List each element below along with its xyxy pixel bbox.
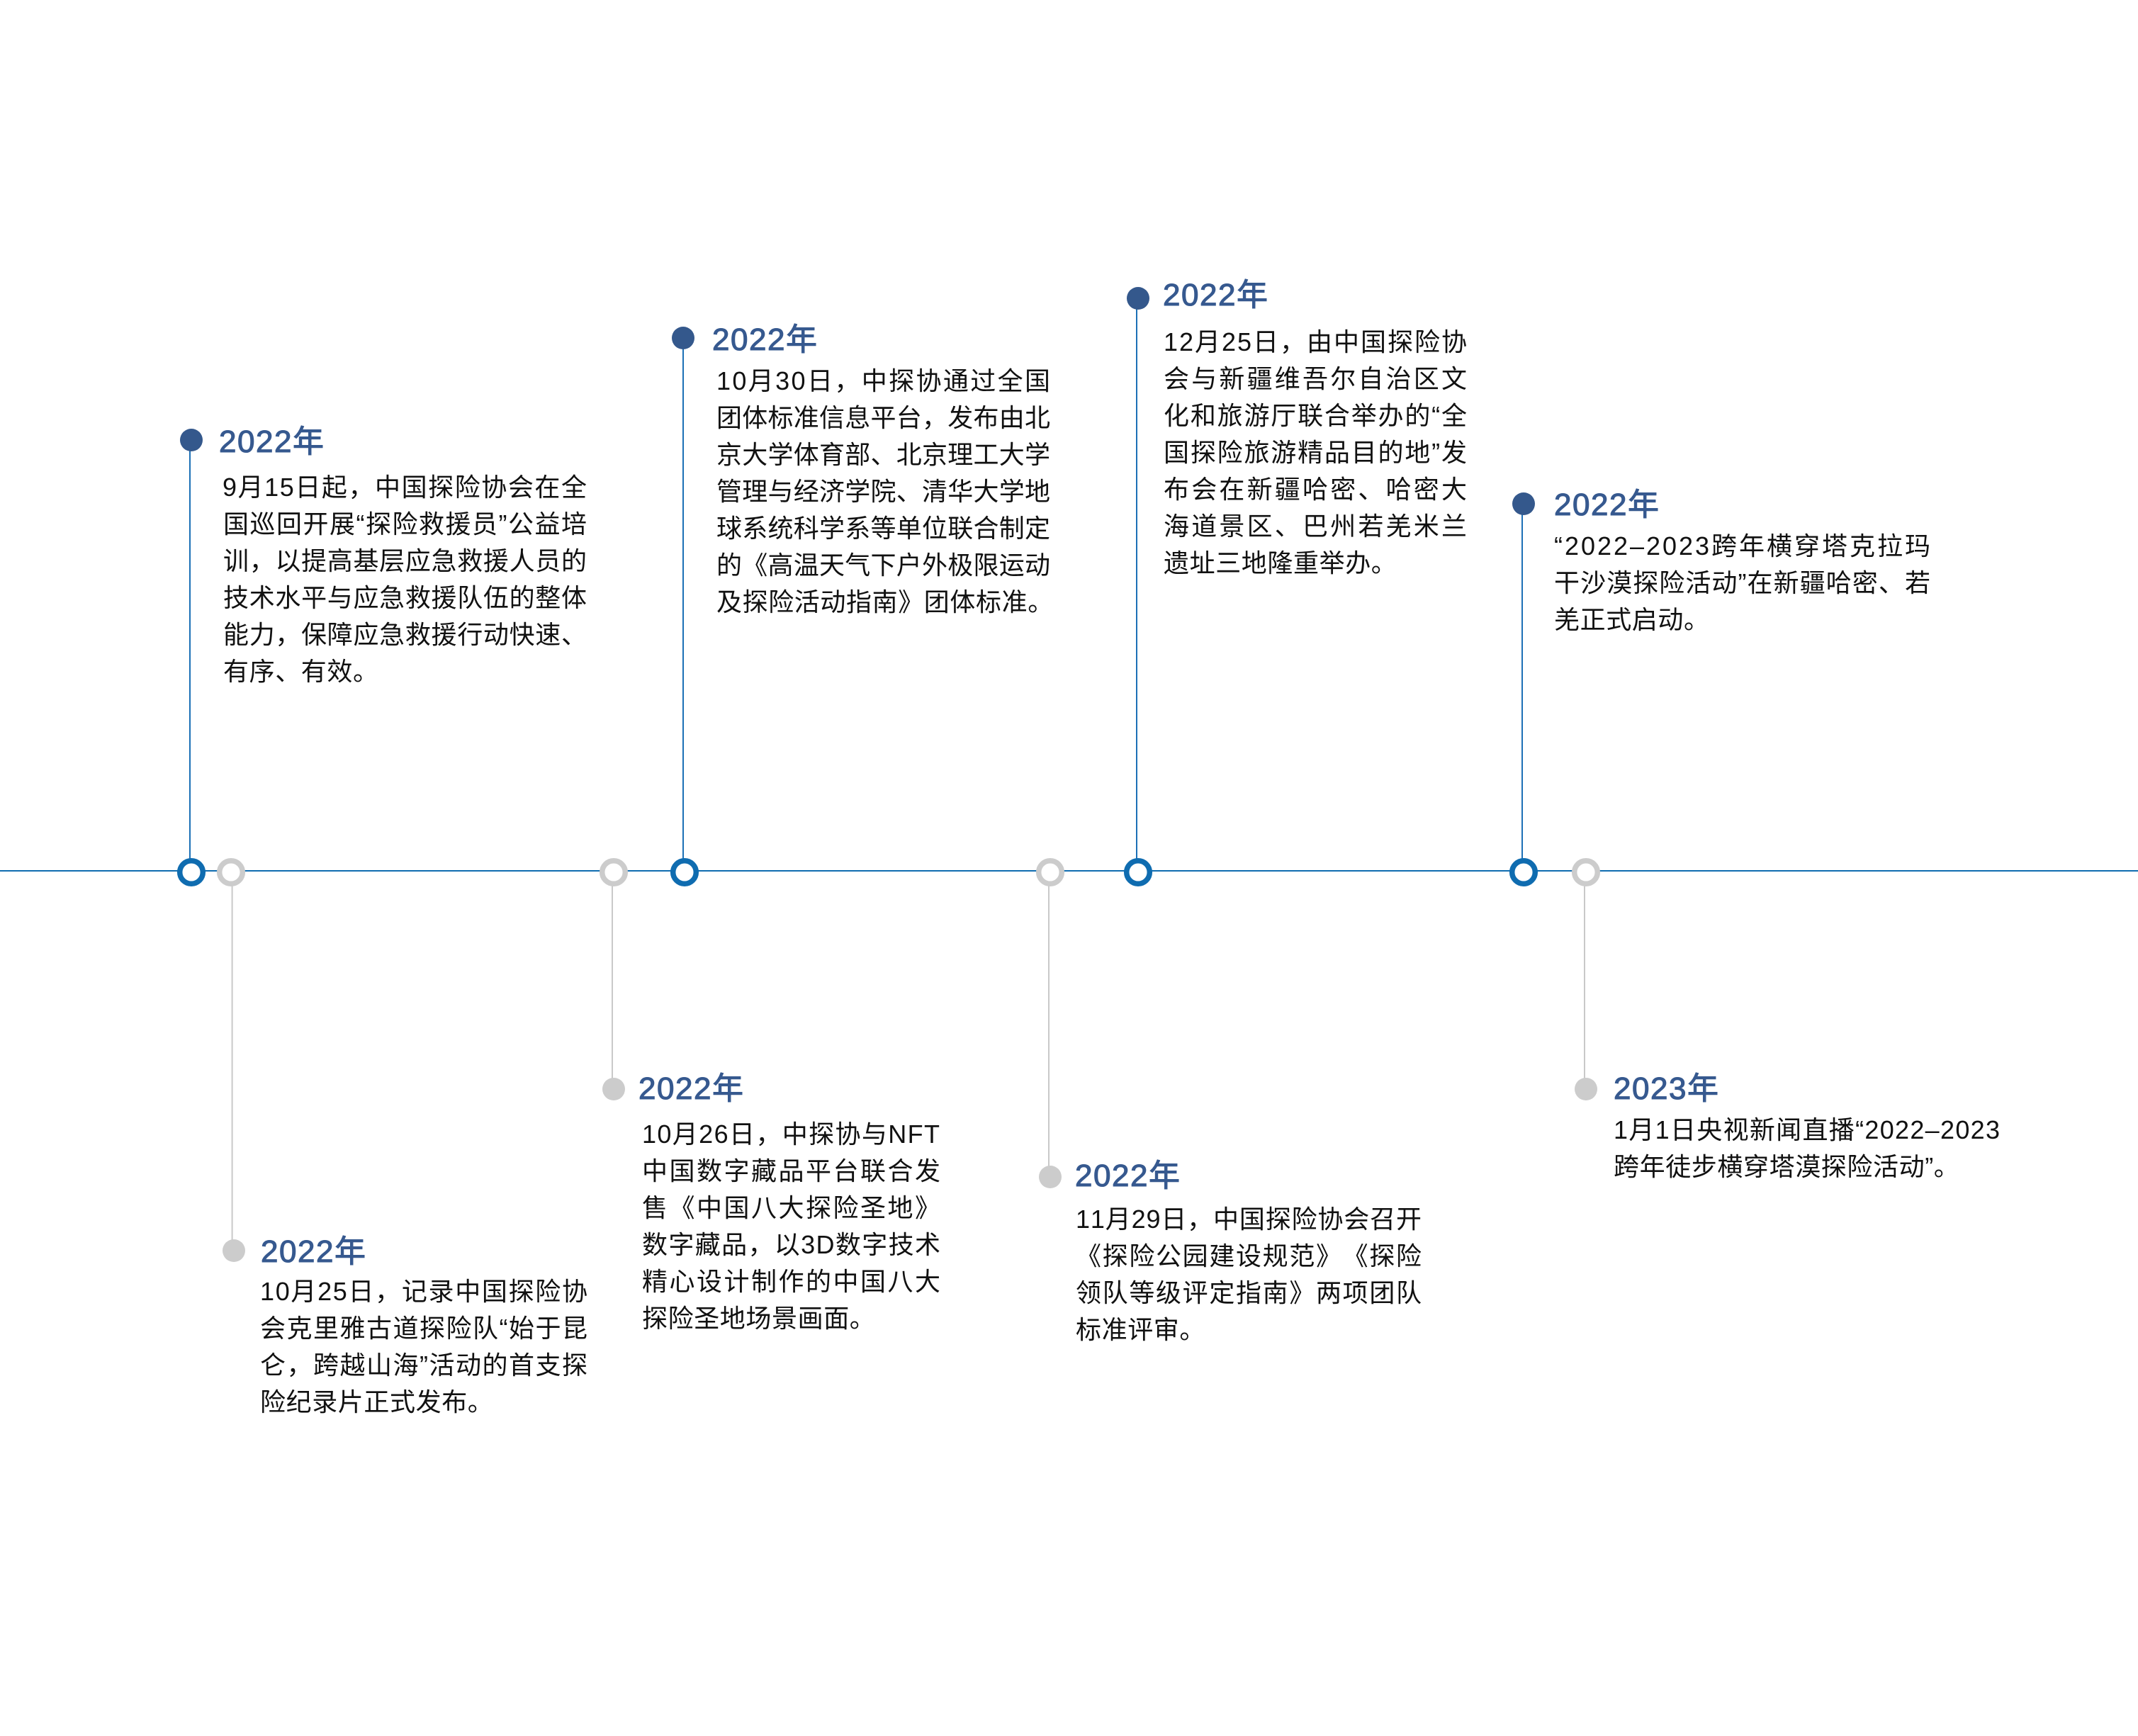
connector line	[232, 882, 233, 1251]
axis marker ring	[673, 861, 696, 884]
connector line	[189, 440, 191, 861]
axis marker ring	[1512, 861, 1535, 884]
description text	[260, 1277, 587, 1416]
event: 9月15日 探险救援员培训	[180, 424, 587, 884]
year heading: 2022年	[219, 424, 324, 459]
axis marker ring	[1127, 861, 1149, 884]
description text: 羌正式启动。	[1554, 605, 1710, 634]
connector line	[1521, 504, 1523, 861]
description text: 跨年徒步横穿塔漠探险活动”。	[1614, 1152, 1959, 1181]
description text: 10月26日，中探协与NFT	[642, 1120, 940, 1149]
description text: 标准评审。	[1076, 1315, 1205, 1344]
description text: 1月1日央视新闻直播“2022–2023	[1614, 1115, 2000, 1144]
event: 跨年横穿塔克拉玛干沙漠启动	[1512, 487, 1930, 884]
description text: 干沙漠探险活动”在新疆哈密、若	[1554, 568, 1930, 597]
marker dot	[223, 1239, 245, 1262]
event: 10月30日 团体标准	[672, 322, 1054, 884]
description text: 9月15日起，中国探险协会在全	[223, 473, 587, 502]
description text: 中国数字藏品平台联合发	[642, 1156, 940, 1185]
year heading: 2022年	[261, 1234, 366, 1269]
axis marker ring	[1039, 861, 1062, 884]
description text: 布会在新疆哈密、哈密大	[1164, 475, 1467, 504]
axis marker ring	[180, 861, 203, 884]
description text	[716, 366, 1054, 616]
description text: “2022–2023跨年横穿塔克拉玛	[1554, 531, 1930, 560]
axis marker ring	[1575, 861, 1597, 884]
event: 2023 央视新闻直播	[1575, 861, 2000, 1181]
description text: 国探险旅游精品目的地”发	[1164, 438, 1467, 467]
description text: 技术水平与应急救援队伍的整体	[223, 583, 587, 612]
description text: 的《高温天气下户外极限运动	[716, 551, 1050, 580]
event: 10月26日 数字藏品	[602, 861, 940, 1333]
description text: 会与新疆维吾尔自治区文	[1164, 364, 1467, 393]
description text: 管理与经济学院、清华大学地	[716, 477, 1050, 506]
description text: 领队等级评定指南》两项团队	[1076, 1278, 1422, 1307]
horizontal timeline axis	[0, 870, 2138, 872]
event: 10月25日 纪录片发布	[220, 861, 587, 1416]
event: 12月25日 精品目的地发布会	[1127, 278, 1467, 884]
connector line	[1048, 882, 1050, 1177]
axis marker ring	[602, 861, 625, 884]
description text: 能力，保障应急救援行动快速、	[223, 620, 587, 649]
description text	[642, 1120, 940, 1333]
marker dot	[180, 429, 203, 451]
connector line	[612, 882, 613, 1089]
description text: 海道景区、巴州若羌米兰	[1164, 512, 1467, 541]
description text: 球系统科学系等单位联合制定	[716, 514, 1050, 543]
description text: 数字藏品，以3D数字技术	[642, 1230, 940, 1259]
year heading: 2022年	[638, 1071, 743, 1106]
connector line	[682, 338, 684, 861]
description text: 仑，跨越山海”活动的首支探	[260, 1351, 587, 1380]
description text: 会克里雅古道探险队“始于昆	[260, 1314, 587, 1343]
description text: 险纪录片正式发布。	[260, 1387, 493, 1416]
description text: 遗址三地隆重举办。	[1164, 548, 1397, 577]
year heading: 2022年	[1163, 278, 1268, 312]
description text: 化和旅游厅联合举办的“全	[1164, 401, 1467, 430]
description text	[1554, 531, 1930, 634]
year heading: 2022年	[712, 322, 817, 357]
description text	[1076, 1205, 1422, 1344]
description text: 有序、有效。	[223, 657, 379, 686]
marker dot	[1575, 1078, 1597, 1100]
description text	[1614, 1115, 2000, 1181]
axis marker ring	[220, 861, 242, 884]
description text: 训，以提高基层应急救援人员的	[223, 546, 587, 575]
description text: 及探险活动指南》团体标准。	[716, 587, 1054, 616]
description text: 12月25日，由中国探险协	[1164, 327, 1467, 356]
year heading: 2022年	[1075, 1159, 1180, 1193]
event: 11月29日 团队标准评审	[1039, 861, 1422, 1344]
connector line	[1136, 300, 1137, 861]
description text	[1164, 327, 1467, 577]
description text: 11月29日，中国探险协会召开	[1076, 1205, 1422, 1234]
description text	[223, 473, 587, 686]
description text: 团体标准信息平台，发布由北	[716, 403, 1050, 432]
description text: 10月25日，记录中国探险协	[260, 1277, 587, 1306]
description text: 10月30日，中探协通过全国	[716, 366, 1050, 395]
marker dot	[1127, 287, 1149, 310]
description text: 售《中国八大探险圣地》	[642, 1193, 940, 1222]
description text: 精心设计制作的中国八大	[642, 1267, 940, 1296]
description text: 京大学体育部、北京理工大学	[716, 440, 1050, 469]
description text: 国巡回开展“探险救援员”公益培	[223, 509, 587, 539]
marker dot	[1512, 492, 1535, 515]
description text: 探险圣地场景画面。	[642, 1304, 875, 1333]
marker dot	[672, 327, 694, 349]
year heading: 2023年	[1614, 1071, 1718, 1106]
marker dot	[1039, 1166, 1062, 1188]
description text: 《探险公园建设规范》《探险	[1076, 1241, 1422, 1270]
marker dot	[602, 1078, 625, 1100]
connector line	[1584, 882, 1585, 1089]
year heading: 2022年	[1554, 487, 1659, 522]
